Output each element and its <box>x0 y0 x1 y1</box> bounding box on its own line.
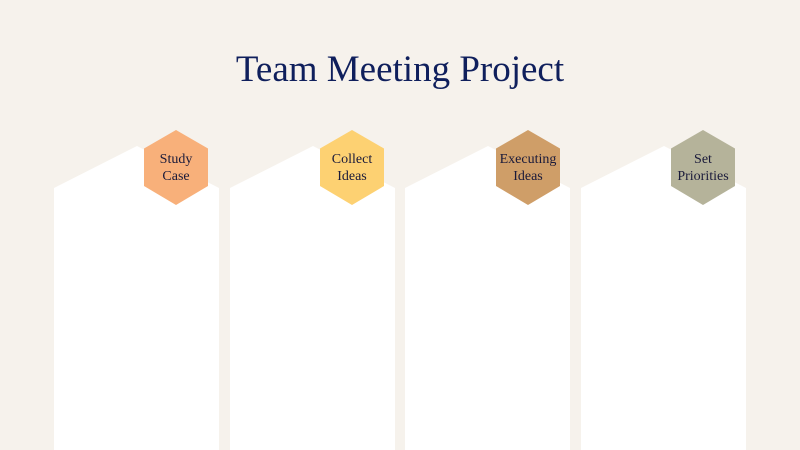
hexagon: study case <box>144 130 208 205</box>
hexagon: set priorities: Priorities <box>677 169 729 184</box>
hexagon: collect ideas: Collect <box>332 152 372 167</box>
hexagon: set priorities: Set <box>694 152 712 167</box>
hexagon: executing ideas <box>496 130 560 205</box>
panel: collect ideas <box>230 130 395 450</box>
hexagon: set priorities <box>671 130 735 205</box>
hexagon: executing ideas: Ideas <box>513 169 543 184</box>
panel: set priorities <box>581 130 746 450</box>
panel: study case <box>54 130 219 450</box>
hexagon: collect ideas <box>320 130 384 205</box>
panel: executing ideas <box>405 130 570 450</box>
title: Team Meeting Project <box>236 49 564 90</box>
hexagon: study case: Study <box>160 152 192 167</box>
hexagon: executing ideas: Executing <box>500 152 556 167</box>
hexagon: collect ideas: Ideas <box>337 169 367 184</box>
hexagon: study case: Case <box>162 169 190 184</box>
